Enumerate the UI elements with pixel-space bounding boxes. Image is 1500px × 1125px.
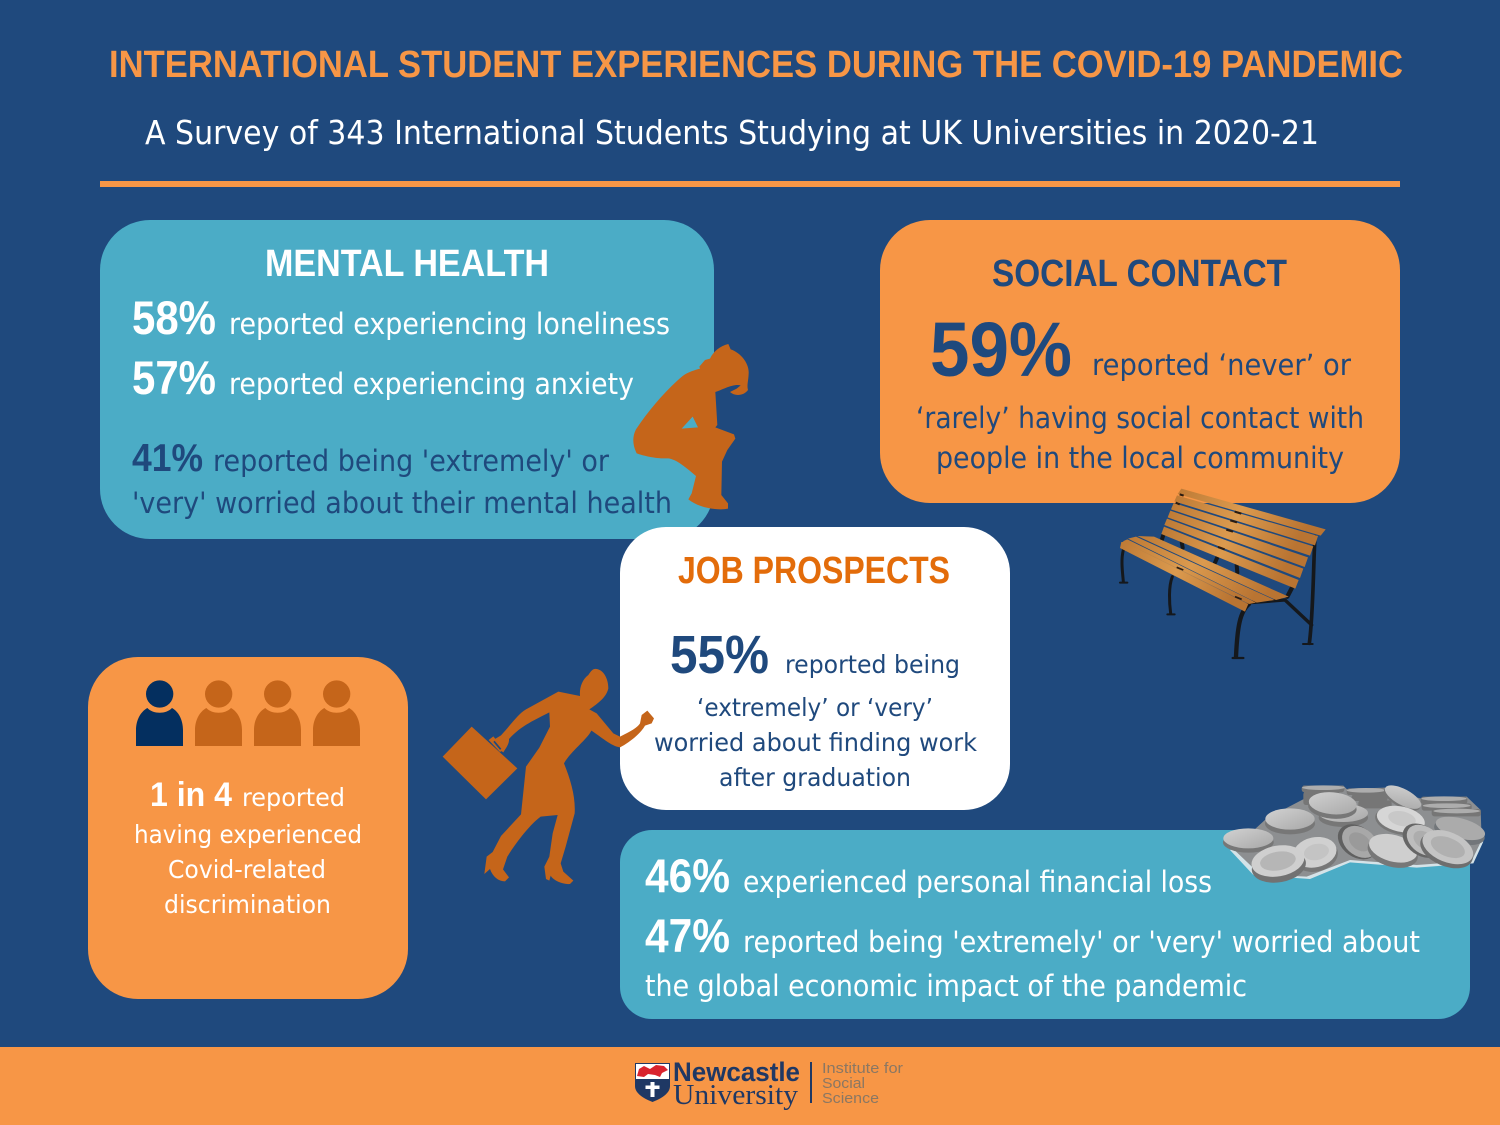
stat: anxiety: 57% (132, 351, 216, 404)
stat: anxiety: reported experiencing anxiety (229, 367, 634, 401)
panel: discrimination (88, 657, 408, 999)
icon: businesswoman silhouette with briefcase (443, 669, 654, 884)
text: social contact description (916, 348, 1364, 475)
logo institute text: Institute for (822, 1060, 903, 1077)
icon: park bench (1120, 489, 1326, 658)
logo wordmark (673, 1057, 800, 1111)
logo institute text (822, 1060, 903, 1107)
stat: financial loss (645, 849, 1212, 902)
logo institute text: Science (822, 1090, 879, 1107)
text: social contact description: ‘rarely’ having social contact with (916, 401, 1364, 435)
icon: four people, one highlighted (136, 680, 360, 746)
stat: global economic worry: 47% (645, 909, 730, 962)
heading: job prospects: JOB PROSPECTS (678, 550, 950, 592)
panel: social contact (880, 220, 1400, 503)
stat: 55%: 55% (670, 625, 769, 685)
text: job prospects description: reported being (785, 650, 960, 679)
stat: loneliness (132, 291, 670, 344)
stat: loneliness: reported experiencing loneliness (229, 307, 670, 341)
icon: seated figure silhouette (633, 344, 749, 509)
text: job prospects description (654, 650, 977, 792)
icon: pile of coins (1223, 781, 1488, 887)
text: discrimination description: Covid-related (168, 855, 326, 884)
stat: global economic worry: the global economic impact of the pandemic (645, 969, 1247, 1003)
stat: global economic worry: reported being 'extremely' or 'very' worried about (743, 925, 1420, 959)
stat: financial loss: experienced personal financial loss (743, 865, 1212, 899)
text: discrimination description: having experienced (134, 820, 362, 849)
title: INTERNATIONAL STUDENT EXPERIENCES DURING THE COVID-19 PANDEMIC (109, 44, 1403, 86)
subtitle: A Survey of 343 International Students Studying at UK Universities in 2020-21 (145, 113, 1319, 152)
heading: mental health: MENTAL HEALTH (265, 243, 549, 285)
stat: loneliness: 58% (132, 291, 216, 344)
stat: 1 in 4: 1 in 4 (150, 776, 232, 814)
text: discrimination description: reported (242, 783, 345, 812)
footer band (0, 1047, 1500, 1125)
text: job prospects description: worried about finding work (654, 728, 977, 757)
logo wordmark: University (673, 1079, 799, 1111)
text: discrimination description: discrimination (164, 890, 331, 919)
text: job prospects description: after graduation (719, 763, 911, 792)
text: social contact description: people in the local community (936, 441, 1344, 475)
logo: Newcastle University Institute for Social Science (635, 1057, 903, 1111)
panel: job prospects (620, 527, 1010, 810)
stat: anxiety (132, 351, 634, 404)
stat: worried about mental health: 41% (132, 437, 203, 480)
stat: financial loss: 46% (645, 849, 730, 902)
stat: global economic worry (645, 909, 1420, 1003)
text: social contact description: reported ‘never’ or (1092, 348, 1351, 382)
stat: worried about mental health (132, 437, 672, 520)
panel: financial (620, 830, 1470, 1019)
panel: mental health (100, 220, 714, 539)
heading: social contact: SOCIAL CONTACT (992, 253, 1287, 295)
text: job prospects description: ‘extremely’ or ‘very’ (697, 693, 933, 722)
logo institute text: Social (822, 1075, 865, 1092)
stat: 59%: 59% (930, 307, 1072, 393)
stat: worried about mental health: 'very' worried about their mental health (132, 486, 672, 520)
stat: worried about mental health: reported being 'extremely' or (213, 444, 609, 478)
text: discrimination description (134, 783, 362, 919)
icon: university shield (635, 1063, 670, 1102)
logo wordmark: Newcastle (673, 1057, 800, 1087)
